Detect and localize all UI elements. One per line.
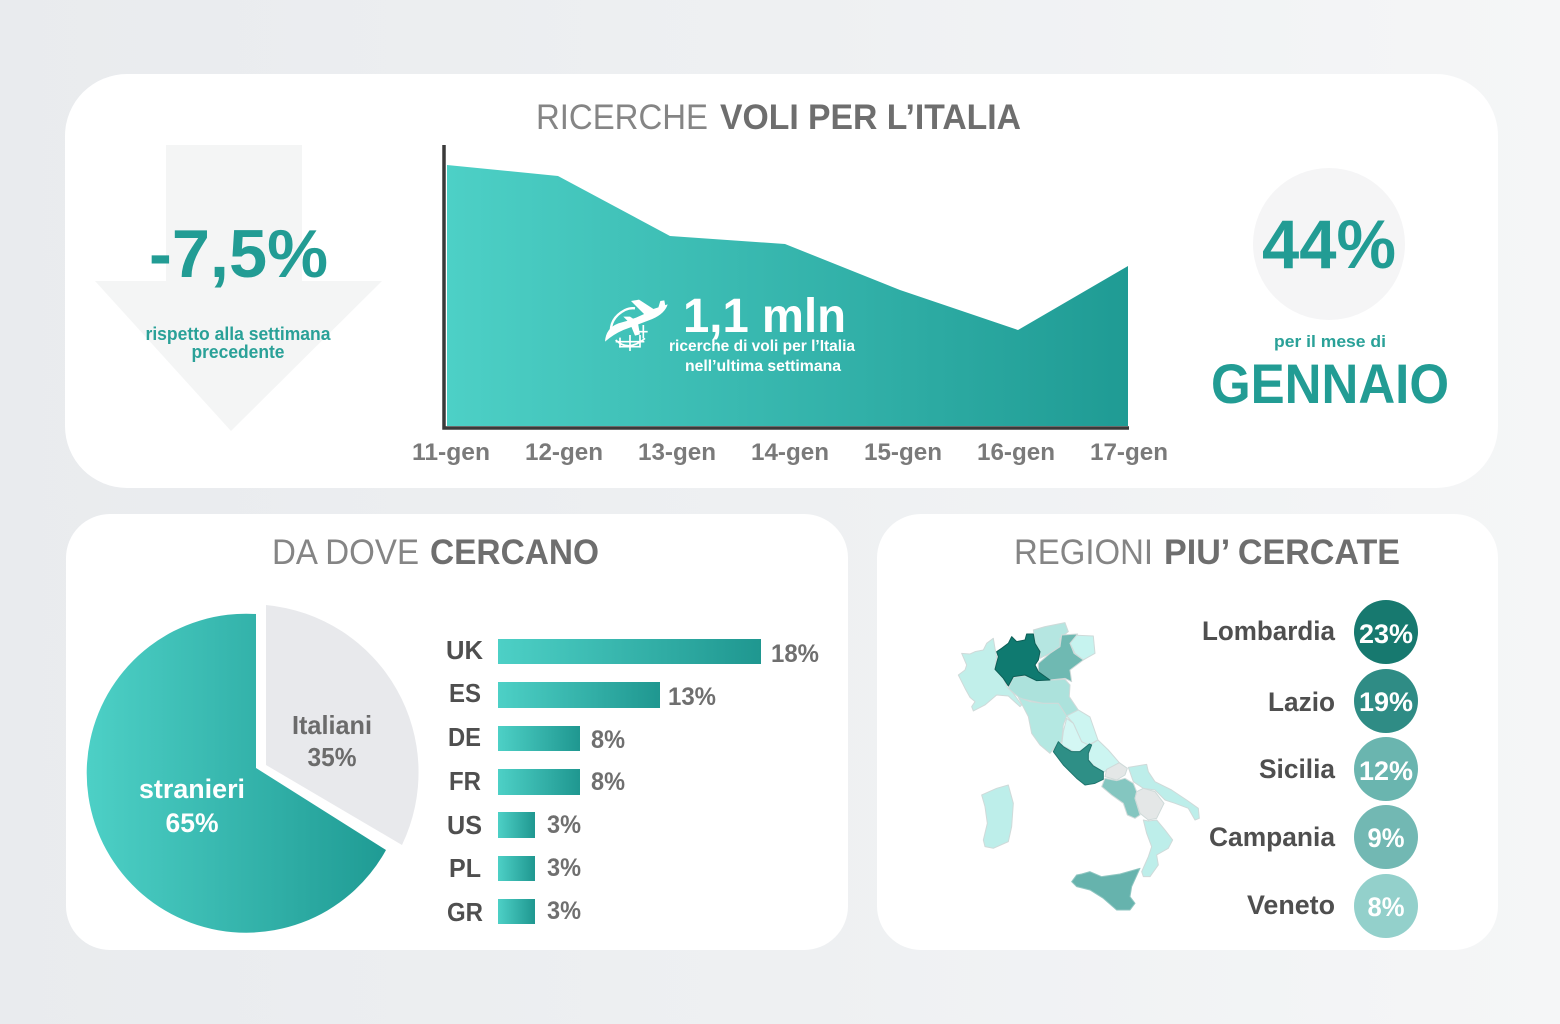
panel: da dove cercano [66,514,848,950]
bar chart: paesi: 8% [591,726,625,754]
stat: 1,1 mln: 1,1 mln [683,290,846,343]
chart x-axis labels: 17-gen [1090,439,1168,466]
stat: -7,5%: -7,5% [149,216,328,292]
bar chart: paesi: DE [448,722,481,752]
ranking: regioni: Lazio [1268,687,1335,717]
text: rispetto alla settimana precedente [146,324,331,362]
ranking: regioni: Sicilia [1259,754,1336,784]
bar chart: paesi: FR [449,766,481,796]
bar chart: paesi: 3% [547,854,581,882]
bar chart: paesi: ES [449,678,481,708]
ranking: regioni: 9% [1368,823,1404,853]
ranking: regioni: Lombardia [1202,616,1336,646]
slice: italiani 35% [266,605,419,845]
text: gennaio: GENNAIO [1211,352,1449,415]
ranking: regioni: 19% [1359,687,1413,717]
heading: ricerche voli: RICERCHE [536,98,708,137]
text: rispetto alla settimana precedente: rispetto alla settimana [146,324,331,344]
chart x-axis labels: 11-gen [412,439,490,466]
heading: ricerche voli: VOLI PER L’ITALIA [720,98,1021,137]
chart x-axis labels: 16-gen [977,439,1055,466]
heading: da dove cercano: DA DOVE [272,533,419,572]
icon: down arrow [95,145,382,431]
bar chart: paesi: 8% [591,768,625,796]
text: rispetto alla settimana precedente: precedente [192,342,284,362]
chart x-axis labels [412,439,1168,466]
heading: da dove cercano: CERCANO [430,533,599,572]
bar chart: paesi: 3% [547,811,581,839]
ranking: regioni: 23% [1359,619,1413,649]
panel: ricerche voli per l'Italia [65,74,1498,488]
ranking: regioni: 8% [1368,892,1404,922]
stat circle: 44%: 44% [1262,206,1396,283]
slice: stranieri 65% [87,614,386,933]
bar chart: paesi [446,635,819,927]
bar chart: paesi: 13% [668,683,716,711]
chart x-axis labels: 12-gen [525,439,603,466]
area chart [444,145,1129,428]
panel: regioni più cercate [877,514,1498,950]
bar chart: paesi: US [447,810,482,840]
text: ricerche di voli per l'Italia: nell’ultima settimana [685,358,841,375]
ranking: regioni: Veneto [1247,890,1335,920]
slice: stranieri 65%: 65% [166,808,218,838]
ranking: regioni [1202,600,1418,938]
chart x-axis labels: 15-gen [864,439,942,466]
slice: italiani 35%: Italiani [292,710,372,740]
text: ricerche di voli per l'Italia [669,338,855,375]
slice: stranieri 65%: stranieri [139,774,245,804]
bar chart: paesi: 3% [547,897,581,925]
chart x-axis labels: 13-gen [638,439,716,466]
map of Italy [958,623,1199,910]
bar chart: paesi: PL [449,853,481,883]
ranking: regioni: Campania [1209,822,1336,852]
stat circle: 44% [1253,168,1405,320]
bar chart: paesi: UK [446,635,483,665]
text: per il mese di: per il mese di [1274,332,1386,351]
chart x-axis labels: 14-gen [751,439,829,466]
bar chart: paesi: 18% [771,640,819,668]
heading: regioni piu' cercate: PIU’ CERCATE [1164,533,1400,572]
ranking: regioni: 12% [1359,756,1413,786]
bar chart: paesi: GR [447,897,483,927]
slice: italiani 35%: 35% [308,742,356,772]
text: ricerche di voli per l'Italia: ricerche di voli per l’Italia [669,338,855,355]
pie chart [87,605,419,933]
heading: regioni piu' cercate: REGIONI [1014,533,1153,572]
icon: plane and globe [605,300,668,351]
